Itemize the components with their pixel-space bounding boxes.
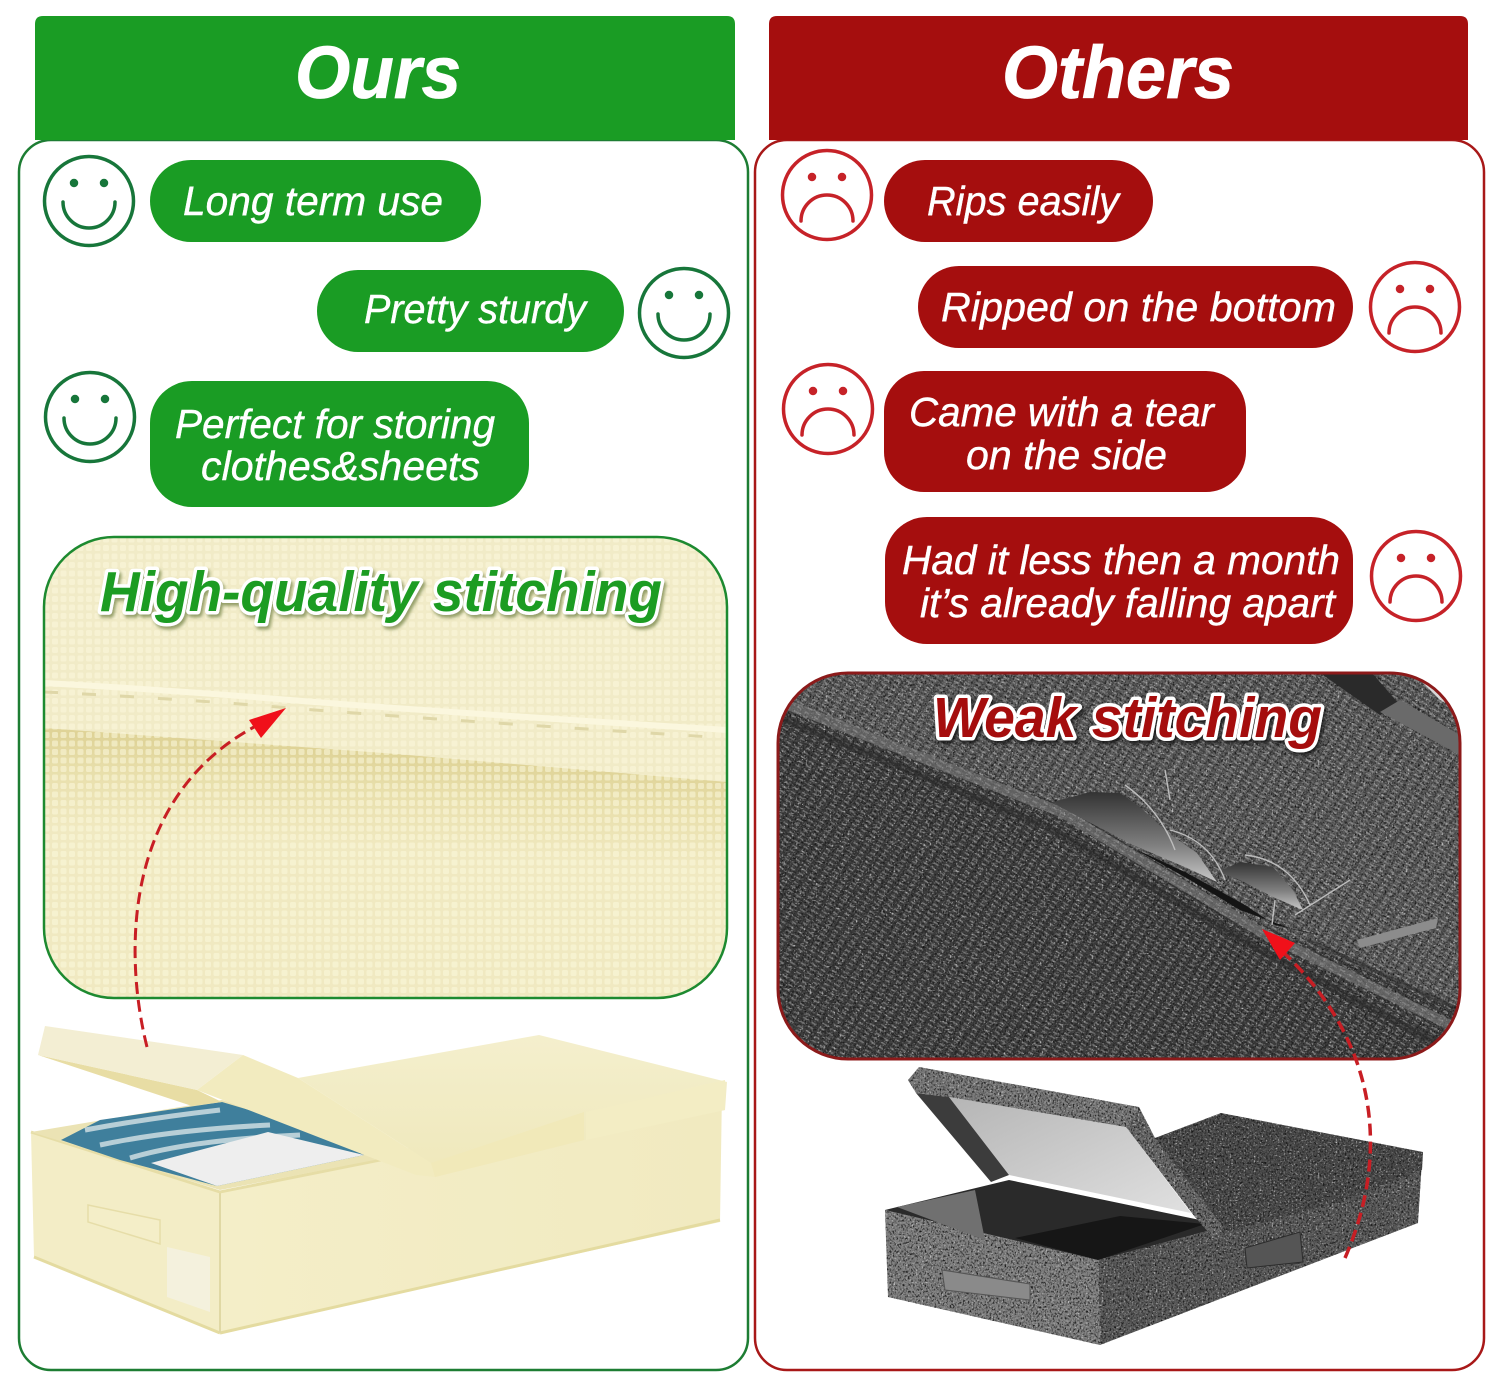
product photo: gray storage box <box>885 1067 1423 1345</box>
box interior <box>31 1100 400 1190</box>
heading: Ours: Ours <box>295 31 461 114</box>
folded white cloth <box>151 1132 364 1186</box>
closed lid top <box>1155 1113 1423 1233</box>
text: had it less then a month: Had it less then a month <box>902 537 1340 583</box>
text: falling apart: it’s already falling apart <box>920 580 1337 626</box>
lid side band <box>916 1093 1009 1182</box>
open lid frame <box>908 1067 1139 1127</box>
pill: pretty sturdy <box>317 270 624 352</box>
box front <box>1098 1160 1422 1345</box>
open lid flap <box>38 1026 243 1090</box>
lid underside <box>949 1097 1191 1213</box>
text: on the side: on the side <box>966 432 1167 478</box>
text: clothes and sheets: clothes&sheets <box>201 443 480 489</box>
pill: rips easily <box>884 160 1153 242</box>
lid slope <box>197 1055 435 1177</box>
pill: perfect for storing <box>150 381 529 507</box>
text: long term use: Long term use <box>183 178 443 224</box>
box handle side <box>942 1270 1030 1300</box>
arrow: dashed red to tear <box>1262 929 1370 1258</box>
text: pretty sturdy: Pretty sturdy <box>364 286 588 332</box>
text: perfect for storing: Perfect for storing <box>175 401 495 447</box>
header: others <box>769 16 1468 140</box>
box handle front <box>1245 1232 1303 1268</box>
icon: smiley 3 <box>46 372 134 462</box>
text: rips easily: Rips easily <box>927 178 1121 224</box>
box label patch <box>167 1247 210 1312</box>
text: ripped on the bottom: Ripped on the bottom <box>941 284 1336 330</box>
box left side <box>31 1132 220 1333</box>
open lid underside <box>38 1055 222 1106</box>
box left side <box>885 1210 1100 1345</box>
text: came with a tear: Came with a tear <box>909 389 1216 435</box>
icon: frown 4 <box>1372 532 1460 620</box>
pill: long term use <box>150 160 481 242</box>
tear 1 <box>1053 792 1217 882</box>
frayed threads <box>1125 770 1350 925</box>
pill: had it less then a month <box>885 517 1353 644</box>
icon: smiley 2 <box>640 268 728 358</box>
arrow: dashed red to stitching <box>135 708 286 1047</box>
box front <box>220 1090 722 1333</box>
icon: frown 3 <box>784 364 872 454</box>
panel: ours <box>19 16 748 1370</box>
lid hinge band <box>1126 1107 1223 1242</box>
box handle <box>88 1205 160 1244</box>
loose strap <box>1357 918 1438 948</box>
heading: Others: Others <box>1002 31 1234 114</box>
pill: came with a tear <box>884 371 1246 492</box>
tear dark gap <box>1133 848 1330 937</box>
panel: others <box>755 16 1484 1370</box>
pill: ripped on the bottom <box>918 266 1353 348</box>
heading: high-quality stitching: High-quality stitching <box>100 560 662 624</box>
icon: frown 2 <box>1370 262 1460 352</box>
lid edge top right <box>1322 674 1397 715</box>
icon: frown 1 <box>782 150 872 240</box>
header: ours <box>35 16 735 140</box>
box interior <box>885 1180 1225 1260</box>
photo panel: weak stitching <box>778 673 1460 1059</box>
icon: smiley 1 <box>44 156 134 246</box>
photo panel: high-quality stitching <box>44 537 727 998</box>
product photo: cream storage box <box>31 1026 727 1333</box>
heading: weak stitching: Weak stitching <box>933 686 1322 750</box>
tear 2 <box>1218 862 1303 910</box>
folded blue cloth <box>61 1102 364 1186</box>
closed lid top <box>298 1035 727 1177</box>
